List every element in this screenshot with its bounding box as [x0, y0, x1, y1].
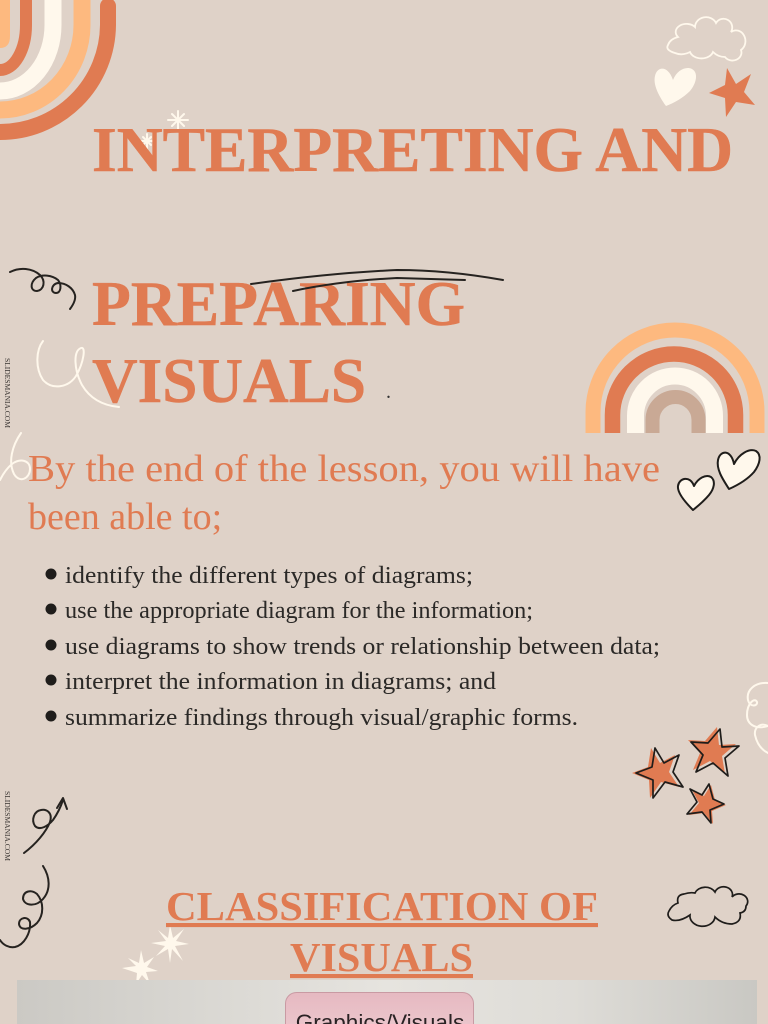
title: .: [386, 381, 391, 403]
title: INTERPRETING AND: [92, 114, 733, 185]
objective 2: use the appropriate diagram for the information;: [65, 597, 533, 624]
icon: black spiral: [0, 866, 49, 947]
icon: cream curl: [37, 341, 119, 407]
star left: [632, 748, 683, 798]
decorative scribble over title: [251, 270, 503, 291]
icon: white cloud: [667, 17, 745, 61]
subtitle: [28, 448, 660, 538]
icon: corner rainbow: [0, 0, 108, 132]
icon: sparkles behind title: [141, 111, 188, 149]
objective 1: identify the different types of diagrams;: [65, 562, 473, 589]
objectives list: [46, 562, 660, 731]
icon: black cloud: [668, 887, 748, 926]
title: [92, 114, 733, 416]
icon: white heart: [655, 68, 696, 106]
subtitle: By the end of the lesson, you will have: [28, 448, 660, 490]
heading: classification of visuals: [166, 883, 598, 980]
slidesmania label bottom: SLIDESMANIA.COM: [3, 791, 12, 861]
icon: cream curl lower: [0, 433, 30, 480]
box: graphics/visuals: [286, 992, 474, 1024]
icon: orange star: [709, 68, 755, 117]
heading: classification of visuals: CLASSIFICATION OF: [166, 883, 598, 929]
icon: outlined hearts: [678, 450, 760, 510]
icon: sparkles bottom: [122, 925, 189, 984]
icon: three stars: [632, 727, 739, 824]
star right: [688, 727, 739, 776]
objective 4: interpret the information in diagrams; and: [65, 668, 496, 695]
objective 3: use diagrams to show trends or relationship between data;: [65, 633, 660, 660]
icon: black curl: [10, 269, 75, 309]
title: VISUALS: [92, 345, 366, 416]
title: PREPARING: [92, 268, 465, 339]
subtitle: been able to;: [28, 496, 222, 538]
slidesmania label top: SLIDESMANIA.COM: [3, 358, 12, 428]
icon: curly arrow: [24, 798, 67, 853]
icon: cream curl right: [747, 683, 768, 753]
star bottom: [687, 784, 726, 824]
heading: classification of visuals: VISUALS: [290, 934, 473, 980]
icon: rainbow: [593, 330, 757, 433]
objective 5: summarize findings through visual/graphic forms.: [65, 704, 578, 731]
panel: embedded slide: [17, 980, 757, 1024]
